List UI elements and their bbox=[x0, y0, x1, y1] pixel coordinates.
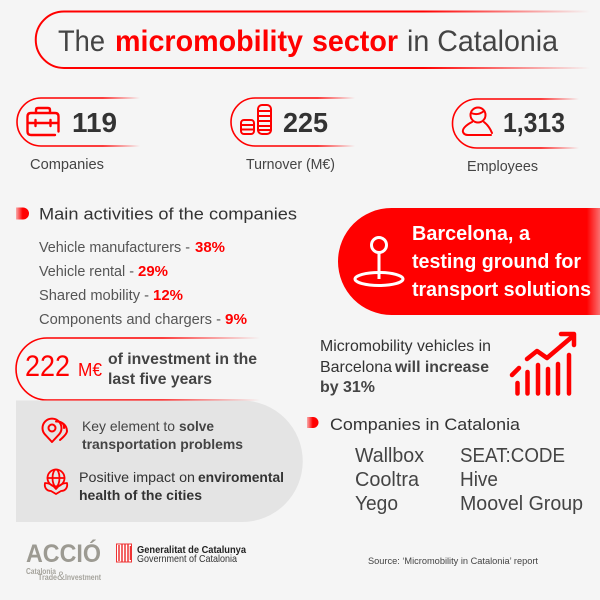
callout: investment: of investment in the bbox=[108, 351, 257, 368]
logo: ACCIÓ: Investment bbox=[65, 573, 101, 582]
icon: map pin bbox=[355, 238, 403, 286]
title: micromobility bbox=[115, 25, 303, 58]
logo: Generalitat de Catalunya: Government of Catalonia bbox=[137, 553, 237, 565]
icon: globe with leaves bbox=[45, 470, 67, 494]
text: vehicles increase: by 31% bbox=[320, 379, 375, 396]
callout: investment bbox=[16, 338, 260, 400]
company list: Moovel Group bbox=[460, 493, 583, 515]
icon: coin stacks bbox=[241, 105, 271, 134]
activity list: 12% bbox=[153, 287, 183, 304]
title: The bbox=[58, 25, 105, 58]
logo: ACCIÓ bbox=[26, 538, 101, 583]
text: key element: solve bbox=[179, 418, 214, 434]
text: key element: Key element to bbox=[82, 418, 175, 434]
company list: Yego bbox=[355, 493, 398, 515]
company list: Hive bbox=[460, 469, 498, 491]
stat: turnover: 225 bbox=[283, 107, 328, 138]
title: sector bbox=[312, 25, 398, 58]
company list bbox=[355, 445, 583, 515]
panel: Barcelona testing ground bbox=[338, 208, 600, 315]
title bbox=[36, 12, 590, 68]
icon: growth chart bbox=[512, 334, 574, 394]
logo: ACCIÓ: ACCIÓ bbox=[26, 538, 101, 568]
heading: main activities: Main activities of the companies bbox=[39, 204, 297, 224]
text: vehicles increase: Barcelona bbox=[320, 359, 392, 376]
title: in Catalonia bbox=[407, 25, 558, 58]
text: positive impact: enviromental bbox=[198, 469, 284, 485]
bullet bbox=[307, 417, 318, 428]
logo: Generalitat de Catalunya bbox=[116, 544, 246, 565]
company list: Wallbox bbox=[355, 445, 424, 467]
activity list: 38% bbox=[195, 239, 225, 256]
icon: double pin bbox=[42, 419, 67, 442]
text: positive impact: Positive impact on bbox=[79, 469, 195, 485]
source note: Source: ‘Micromobility in Catalonia’ report bbox=[368, 556, 539, 566]
text: vehicles increase: Micromobility vehicles in bbox=[320, 338, 491, 355]
text: positive impact: health of the cities bbox=[79, 487, 202, 503]
callout: investment: last five years bbox=[108, 371, 212, 388]
activity list: 29% bbox=[138, 263, 168, 280]
emblem bbox=[116, 544, 132, 562]
activity list: Shared mobility - bbox=[39, 287, 149, 304]
bullet bbox=[16, 208, 29, 220]
panel: companies in Catalonia bbox=[307, 415, 583, 515]
stat: companies: 119 bbox=[72, 107, 117, 138]
heading: Barcelona: transport solutions bbox=[412, 279, 591, 301]
stat: employees: 1,313 bbox=[503, 107, 565, 138]
icon: briefcase bbox=[28, 108, 58, 135]
text: vehicles increase: will increase bbox=[394, 359, 489, 376]
activity list bbox=[39, 239, 247, 328]
stat: companies bbox=[17, 98, 140, 173]
text: key element bbox=[82, 418, 243, 452]
heading: Barcelona: Barcelona, a bbox=[412, 223, 531, 245]
stat: turnover: Turnover (M€) bbox=[246, 156, 335, 173]
company list: SEAT:CODE bbox=[460, 445, 565, 467]
activity list: Components and chargers - bbox=[39, 311, 221, 328]
icon: person bbox=[463, 108, 492, 135]
callout: investment: 222 bbox=[25, 350, 70, 383]
logo: Generalitat de Catalunya: Generalitat de Catalunya bbox=[137, 544, 246, 556]
stat: employees: Employees bbox=[467, 158, 538, 175]
stat: employees bbox=[452, 99, 579, 175]
logo: ACCIÓ: Trade bbox=[38, 573, 57, 582]
logo: ACCIÓ: & bbox=[57, 569, 65, 583]
callout: investment: M€ bbox=[78, 360, 102, 380]
heading: companies: Companies in Catalonia bbox=[330, 415, 521, 434]
company list: Cooltra bbox=[355, 469, 420, 491]
stat: turnover bbox=[231, 98, 355, 173]
heading: Barcelona: testing ground for bbox=[412, 251, 581, 273]
text: positive impact bbox=[79, 469, 284, 503]
logo: ACCIÓ: Catalonia bbox=[26, 567, 56, 576]
heading: Barcelona bbox=[412, 223, 591, 301]
activity list: Vehicle rental - bbox=[39, 263, 134, 280]
activity list: Vehicle manufacturers - bbox=[39, 239, 190, 256]
activity list: 9% bbox=[225, 311, 247, 328]
stat: companies: Companies bbox=[30, 156, 104, 173]
text: key element: transportation problems bbox=[82, 436, 243, 452]
panel: benefits bbox=[16, 400, 303, 522]
text: vehicles increase bbox=[320, 338, 491, 396]
panel: main activities bbox=[16, 204, 297, 328]
